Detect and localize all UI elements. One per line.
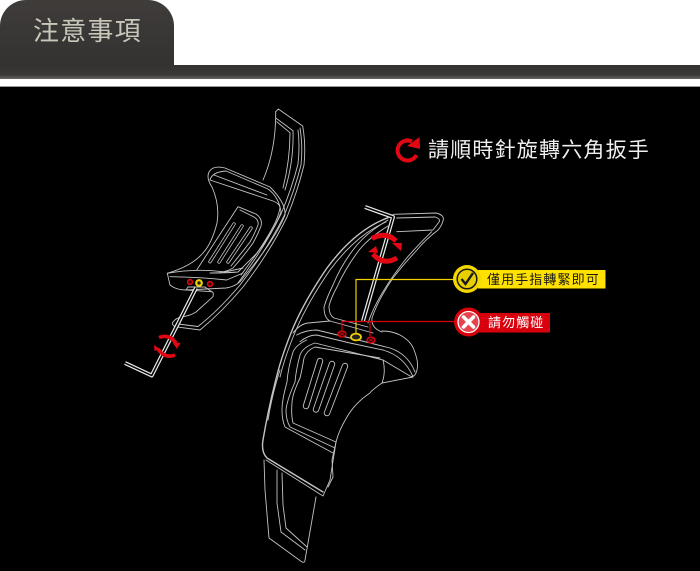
left hex key — [125, 288, 196, 376]
cross badge — [454, 308, 483, 336]
red leader line — [342, 322, 458, 336]
left paddle — [167, 109, 305, 330]
right paddle — [262, 213, 443, 562]
red label text: 請勿觸碰 — [488, 315, 544, 330]
left rotation arrows — [154, 336, 180, 356]
right screws — [338, 331, 375, 343]
yellow label text: 僅用手指轉緊即可 — [487, 272, 600, 287]
yellow leader line — [356, 280, 456, 333]
check badge — [453, 265, 481, 293]
title: 注意事項 — [33, 16, 142, 46]
right hex key — [363, 207, 393, 321]
instruction text: 請順時針旋轉六角扳手 — [428, 139, 650, 162]
red label bar — [478, 313, 550, 332]
left paddle grip slots — [210, 224, 251, 262]
right rotation arrows — [368, 235, 402, 261]
header tab — [0, 0, 174, 65]
header band — [0, 65, 700, 79]
left screws — [188, 280, 212, 286]
right paddle grip slots — [306, 361, 345, 413]
yellow label bar — [478, 270, 606, 288]
clockwise arrow icon — [398, 137, 420, 160]
